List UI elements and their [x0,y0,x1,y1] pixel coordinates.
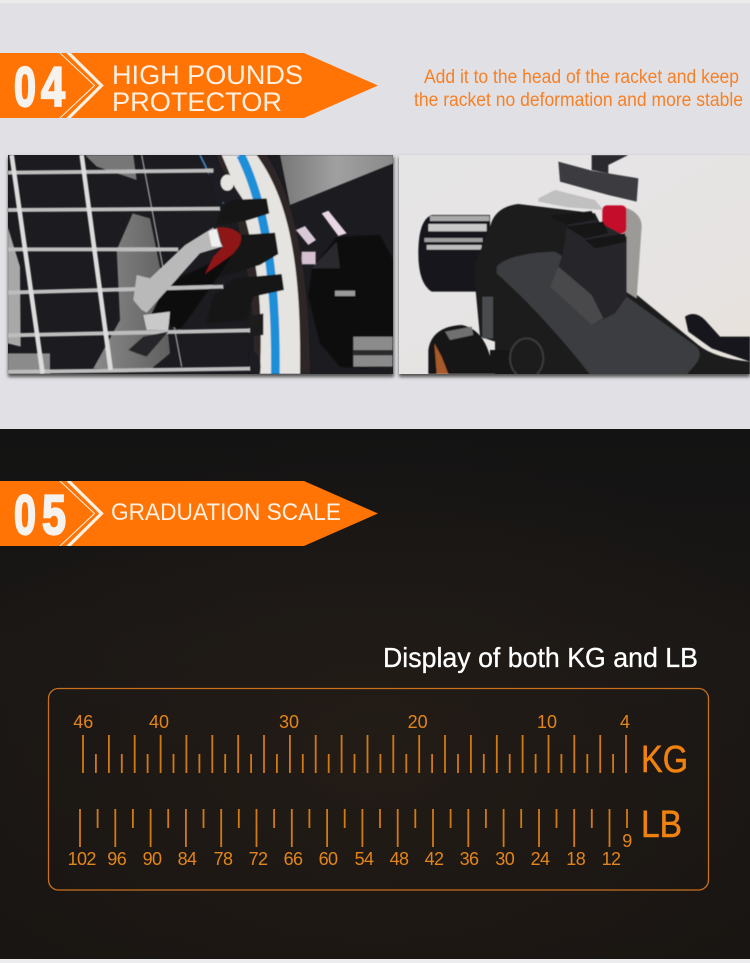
LB numbers: 30 [495,849,515,869]
banner arrow shape [0,481,378,546]
strings [8,171,250,372]
bottom knobs [428,325,493,374]
banner title: HIGH POUNDS [112,60,303,90]
heading: Display of both KG and LB [383,642,698,673]
LB numbers: 78 [214,849,233,869]
LB scale [68,804,682,869]
KG scale [73,712,688,781]
KG numbers: 20 [408,712,428,732]
KG numbers: 40 [149,712,169,732]
KG numbers: 10 [537,712,557,732]
LB numbers: 18 [566,849,586,869]
KG numbers: 30 [279,712,299,732]
LB numbers: 24 [531,849,550,869]
banner title: PROTECTOR [112,87,282,117]
LB unit label: LB [641,804,682,846]
right knob [685,314,750,362]
LB numbers: 90 [143,849,162,869]
LB numbers: 72 [249,849,268,869]
LB numbers: 60 [319,849,338,869]
red pin [602,205,626,233]
metal plate [93,213,170,370]
number 04: 0 [14,55,36,118]
racket frame [217,155,310,374]
KG numbers: 4 [620,712,630,732]
LB numbers: 54 [355,849,374,869]
top edge strip [0,0,750,3]
main body [475,204,750,377]
LB numbers: 102 [68,849,96,869]
banner 05 [0,481,378,546]
chevron icon [59,53,104,118]
photo shadow right [399,157,750,377]
panel frame [48,688,708,890]
KG numbers [73,712,630,732]
section 04 [0,48,750,378]
LB numbers [68,831,632,869]
LB numbers: 66 [284,849,303,869]
matte plate [497,252,700,377]
KG ticks [83,735,626,773]
warm glow [0,429,750,959]
KG unit label: KG [641,739,688,781]
racket background [280,155,393,205]
number 05 [14,483,66,546]
photo shadow left [8,157,394,377]
KG numbers: 46 [73,712,93,732]
LB numbers: 36 [460,849,479,869]
black comb [558,220,628,320]
bottom edge strip [0,959,750,963]
LB ticks [80,809,627,847]
LB numbers: 48 [390,849,409,869]
number 04: 4 [41,55,65,118]
LB numbers: 42 [425,849,444,869]
top clamp [592,155,628,173]
LB numbers: 9 [622,831,632,851]
scale panel [48,688,708,890]
red tip [205,227,241,274]
chevron icon [59,481,104,546]
banner title: GRADUATION SCALE [111,499,341,526]
banner 04 [0,53,378,118]
LB numbers: 96 [107,849,127,869]
photo: protector on racket strings [8,155,393,374]
black notch tabs [217,198,269,225]
LB numbers: 84 [178,849,197,869]
silver lever [133,227,223,313]
section 05 [0,476,708,890]
knob [308,235,393,368]
number 04 [14,55,65,118]
number 05: 0 [14,483,36,546]
light background section [0,0,750,429]
number 05: 5 [42,483,66,546]
photo: protector close-up [399,155,750,378]
banner arrow shape [0,53,378,118]
dark background section [0,429,750,959]
silver bracket [622,207,642,298]
left knob [418,215,490,292]
LB numbers: 12 [602,849,621,869]
